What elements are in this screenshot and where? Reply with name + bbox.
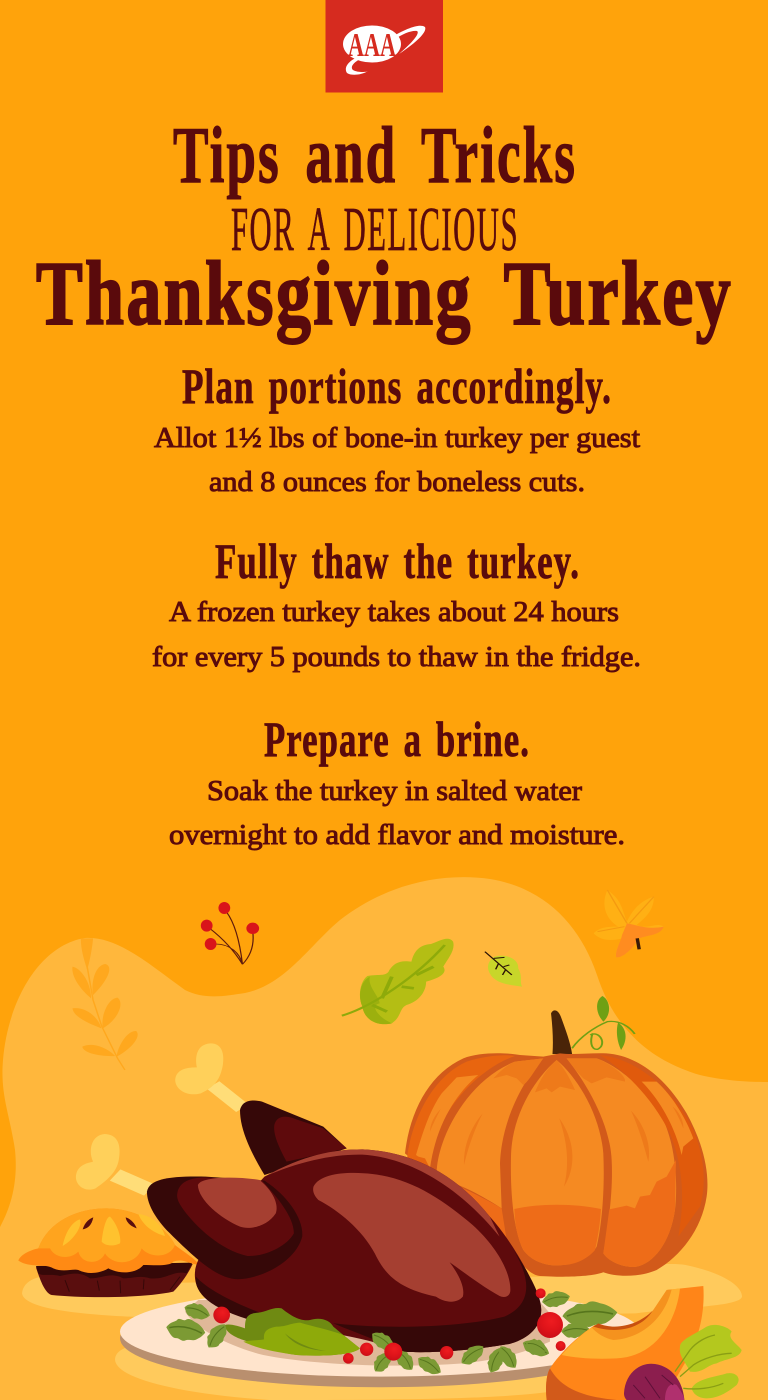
pie [18,1208,199,1297]
plate [120,1287,639,1387]
ground shadows [22,1264,742,1400]
cranberries [213,1307,453,1364]
tip: thaw [152,533,641,673]
title [36,112,733,344]
right herb leaves [524,1289,618,1357]
tip: thaw: Fully thaw the turkey. [215,533,580,589]
right garnish and squash [524,1286,742,1400]
tip: brine: overnight to add flavor and moisture. [169,820,625,851]
tip: brine [169,711,625,851]
beet greens [675,1325,742,1398]
bones [76,1043,242,1190]
tip: thaw: A frozen turkey takes about 24 hours [169,597,619,628]
title: Tips and Tricks [173,112,577,200]
tip: brine: Soak the turkey in salted water [207,776,583,807]
turkey leg back [240,1101,347,1175]
turkey body [195,1149,541,1352]
tip: plan portions: and 8 ounces for boneless cuts. [209,467,585,498]
plate inner shadow [185,1287,550,1366]
tip: thaw: for every 5 pounds to thaw in the fridge. [152,642,641,673]
background blob [0,877,768,1400]
lettuce and herb garnish [165,1300,552,1379]
right berries [536,1288,566,1351]
logo [326,0,443,92]
icon: maple leaf [594,890,664,957]
beet [624,1364,684,1400]
logo: AAA [348,27,396,64]
tip: plan portions [154,358,640,498]
tip: plan portions: Allot 1½ lbs of bone-in turkey per guest [154,423,640,454]
autumn decorations [72,890,664,1070]
pumpkin [405,1053,707,1277]
herb leaves [165,1300,552,1379]
tip: brine: Prepare a brine. [264,711,530,767]
icon: green oak leaf [342,939,454,1024]
turkey leg front [147,1177,302,1279]
icon: faint branch [72,938,138,1070]
icon: red berries [201,902,259,964]
icon: small green leaf [485,952,522,987]
pumpkin stem and vine [551,996,635,1054]
lettuce [225,1308,360,1356]
squash wedge [546,1286,704,1400]
